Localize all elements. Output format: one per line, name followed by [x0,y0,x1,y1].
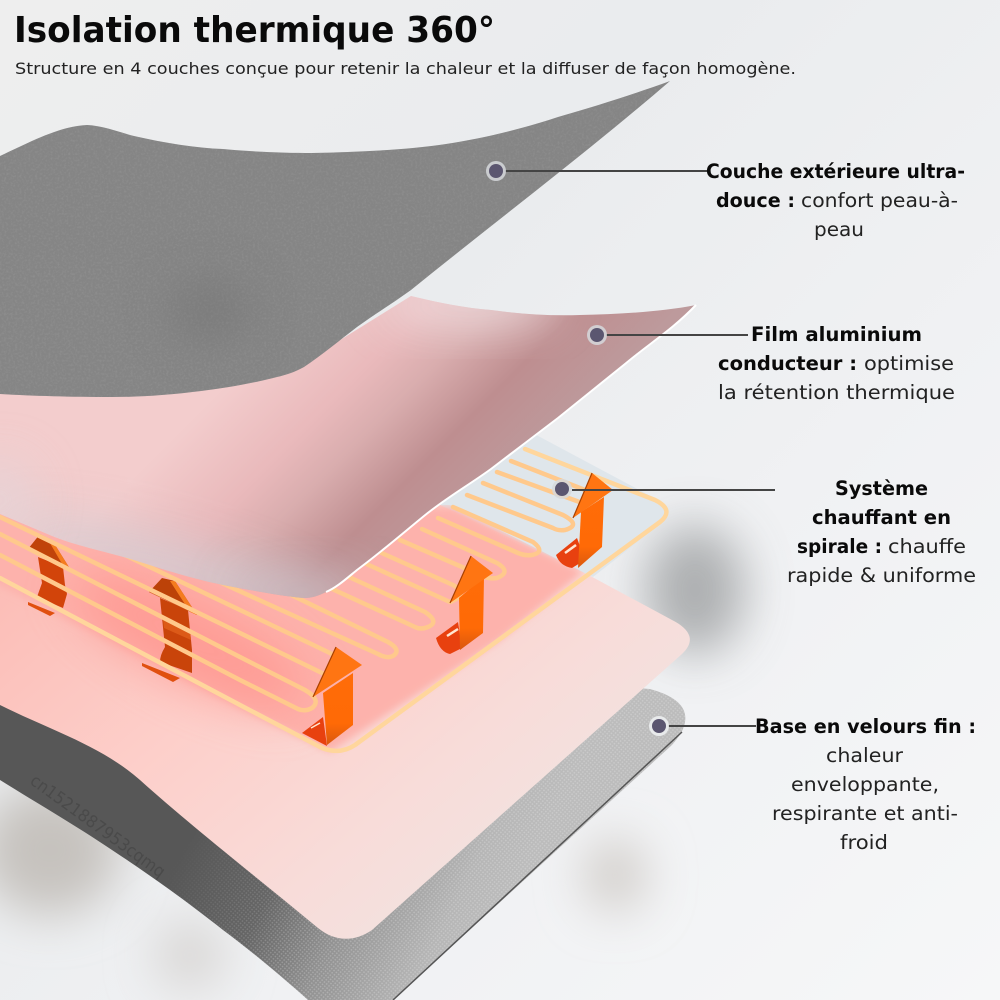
callout: heating system [552,477,976,587]
label text: enveloppante, [791,773,939,796]
layer 1: soft grey outer fabric [0,80,680,400]
label text: douce : [716,189,795,212]
heat arrow 2 (behind coil) [142,578,197,682]
heat arrow 1 (behind coil) [28,534,72,616]
heat arrow 3 [302,647,362,746]
heat arrow 4 [436,556,493,654]
layer 4: velvet base [0,688,686,1000]
label text: chaleur [826,744,904,767]
leader line and marker [552,479,775,499]
label text [787,477,976,587]
label text [755,715,976,854]
label text: conducteur : [718,352,857,375]
callout: outer layer [486,160,965,241]
leader line and marker [649,716,756,736]
label text: respirante et anti- [772,802,958,825]
leader line and marker [486,161,707,181]
glass panel upper right [440,430,669,577]
title: Isolation thermique 360° [14,10,495,51]
label text: confort peau-à- [801,189,958,212]
label text: Système [835,477,928,500]
label text: froid [840,831,888,854]
label text: peau [814,218,864,241]
heat glow [0,500,583,752]
callout: aluminium film [587,323,955,404]
label text: spirale : [797,535,882,558]
watermark text: cn1521887953cqmq [26,771,169,882]
label text: Couche extérieure ultra- [706,160,965,183]
label text: Film aluminium [751,323,922,346]
leader line and marker [587,325,748,345]
pink sheet [0,500,690,939]
label text: Base en velours fin : [755,715,976,738]
label text [718,323,955,404]
label text: chauffant en [812,506,951,529]
label text: la rétention thermique [718,381,955,404]
label text: chauffe [888,535,966,558]
layer 2: conductive aluminium film [0,296,696,598]
layer 3: pink sheet and heating system [0,430,690,939]
label text [706,160,965,241]
heat arrow 5 [556,473,613,568]
subtitle: Structure en 4 couches conçue pour retenir la chaleur et la diffuser de façon homogène. [15,59,796,78]
callout: velvet base [649,715,976,854]
label text: optimise [864,352,954,375]
label text: rapide & uniforme [787,564,976,587]
spiral heating coil [0,449,666,751]
